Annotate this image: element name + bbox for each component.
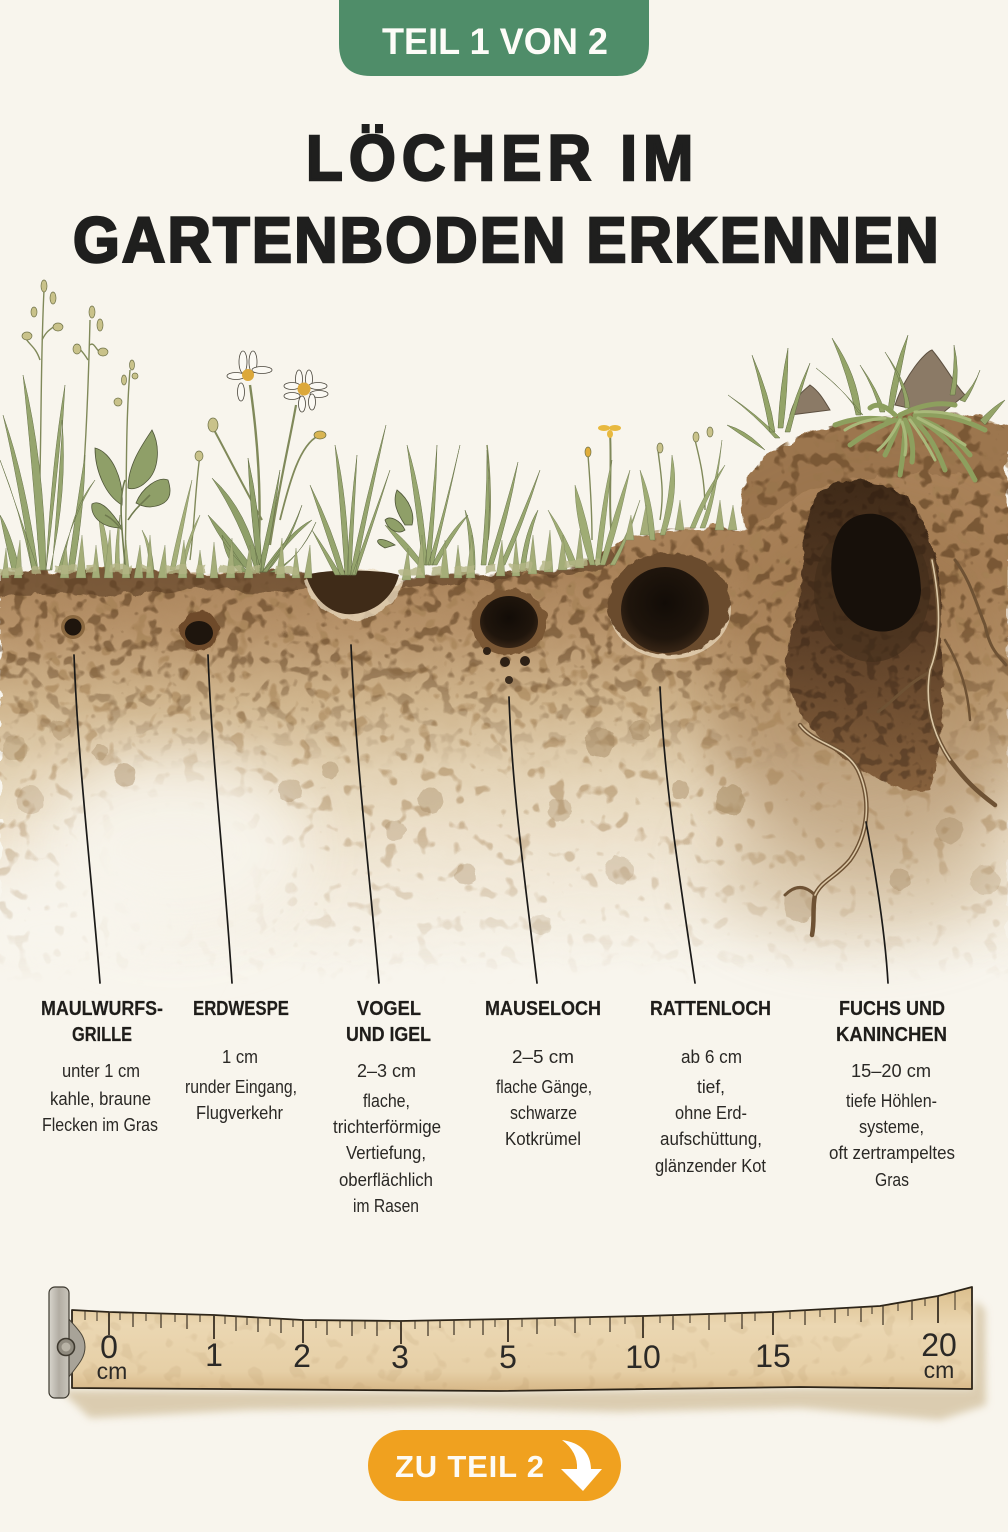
meadow blades bbox=[0, 375, 95, 570]
hole: fox and rabbit burrow bbox=[784, 478, 944, 792]
label: fox and rabbit: oft zertrampeltes bbox=[829, 1143, 955, 1163]
label: bird and hedgehog: VOGEL bbox=[357, 998, 421, 1020]
label: fox and rabbit: tiefe Höhlen- bbox=[846, 1091, 937, 1111]
grass and flowers on the lawn bbox=[0, 280, 1005, 580]
measuring tape ruler bbox=[49, 1285, 986, 1420]
label: bird and hedgehog: Vertiefung, bbox=[346, 1143, 426, 1163]
paler area on the left bbox=[0, 760, 310, 990]
button: to part 2 bbox=[368, 1430, 621, 1501]
label: fox and rabbit bbox=[829, 998, 955, 1190]
label: mouse hole: schwarze bbox=[510, 1103, 577, 1123]
label: rat hole: aufschüttung, bbox=[660, 1129, 762, 1149]
label: mouse hole: flache Gänge, bbox=[496, 1077, 592, 1097]
label: ground wasp: 1 cm bbox=[222, 1047, 258, 1067]
icon: curved down arrow bbox=[561, 1440, 602, 1491]
title: GARTENBODEN ERKENNEN bbox=[73, 205, 939, 276]
ruler shadow bbox=[60, 1300, 986, 1420]
tab: part label bbox=[339, 0, 649, 76]
label: ground wasp: ERDWESPE bbox=[193, 998, 289, 1020]
measuring tape ruler: 20 bbox=[921, 1327, 957, 1363]
measuring tape ruler: 1 bbox=[205, 1337, 223, 1373]
label: bird and hedgehog: UND IGEL bbox=[346, 1024, 431, 1046]
label: mole cricket bbox=[41, 998, 163, 1135]
measuring tape ruler: cm bbox=[924, 1357, 954, 1383]
label: ground wasp bbox=[185, 998, 297, 1123]
label: mouse hole: MAUSELOCH bbox=[485, 998, 601, 1020]
label: mouse hole: Kotkrümel bbox=[505, 1129, 581, 1149]
label: fox and rabbit: FUCHS UND bbox=[839, 998, 945, 1020]
label: mouse hole: 2–5 cm bbox=[512, 1047, 574, 1067]
buttercup bbox=[598, 425, 621, 438]
thin stems with seeds bbox=[24, 290, 705, 560]
soil base bbox=[0, 411, 1008, 985]
label: mole cricket: GRILLE bbox=[72, 1024, 132, 1046]
daisies bbox=[227, 351, 328, 412]
leaves bbox=[92, 430, 413, 548]
title bbox=[73, 123, 939, 276]
button: to part 2: ZU TEIL 2 bbox=[395, 1449, 544, 1484]
label: mole cricket: unter 1 cm bbox=[62, 1061, 140, 1081]
label: fox and rabbit: 15–20 cm bbox=[851, 1061, 931, 1081]
mound surface mottling bbox=[741, 411, 1008, 530]
label: bird and hedgehog: 2–3 cm bbox=[357, 1061, 416, 1081]
label: rat hole: ohne Erd- bbox=[675, 1103, 747, 1123]
tab: part label: TEIL 1 VON 2 bbox=[382, 21, 608, 62]
measuring tape ruler: 10 bbox=[625, 1339, 661, 1375]
round soil spots bbox=[2, 720, 1000, 935]
label: mole cricket: kahle, braune bbox=[50, 1089, 151, 1109]
label: mouse hole bbox=[485, 998, 601, 1149]
label: mole cricket: MAULWURFS- bbox=[41, 998, 163, 1020]
hole: mole cricket bbox=[61, 615, 85, 639]
rocks on the mound bbox=[790, 350, 965, 415]
seed heads bbox=[22, 280, 713, 461]
measuring tape ruler: 5 bbox=[499, 1339, 517, 1375]
dark topsoil band bbox=[0, 548, 616, 596]
label: ground wasp: runder Eingang, bbox=[185, 1077, 297, 1097]
darker soil on the right bbox=[705, 510, 1008, 940]
label: bird and hedgehog: flache, bbox=[363, 1091, 410, 1111]
grass mat on the mound bbox=[835, 404, 985, 480]
tick marks bbox=[85, 1292, 955, 1344]
label: bird and hedgehog: trichterförmige bbox=[333, 1117, 441, 1137]
measuring tape ruler: 3 bbox=[391, 1339, 409, 1375]
mottled soil blotches bbox=[0, 400, 1008, 1000]
label: rat hole: glänzender Kot bbox=[655, 1156, 766, 1176]
measuring tape ruler: 15 bbox=[755, 1338, 791, 1374]
metal end clip bbox=[68, 1318, 85, 1378]
label: ground wasp: Flugverkehr bbox=[196, 1103, 283, 1123]
label: fox and rabbit: systeme, bbox=[859, 1117, 924, 1137]
measuring tape ruler: cm bbox=[97, 1358, 127, 1384]
scale numbers: 0 bbox=[100, 1329, 118, 1365]
label: rat hole: RATTENLOCH bbox=[650, 998, 771, 1020]
short lawn grass bbox=[2, 500, 737, 580]
mound grass bbox=[727, 335, 1005, 450]
measuring tape ruler: 2 bbox=[293, 1338, 311, 1374]
label: bird and hedgehog: oberflächlich bbox=[339, 1170, 433, 1190]
soil cross-section illustration bbox=[0, 400, 1008, 1000]
label: bird and hedgehog bbox=[333, 998, 441, 1216]
label: mole cricket: Flecken im Gras bbox=[42, 1115, 158, 1135]
tape mottling bbox=[72, 1285, 972, 1391]
label: rat hole: ab 6 cm bbox=[681, 1047, 742, 1067]
hole: rat bbox=[608, 553, 731, 659]
label: rat hole: tief, bbox=[697, 1077, 725, 1097]
hole: bird and hedgehog crater bbox=[304, 569, 403, 620]
title: LÖCHER IM bbox=[306, 123, 693, 194]
label: fox and rabbit: Gras bbox=[875, 1170, 909, 1190]
hole: ground wasp bbox=[179, 611, 219, 651]
label: bird and hedgehog: im Rasen bbox=[353, 1196, 419, 1216]
hole: mouse with droppings bbox=[471, 589, 547, 684]
label: fox and rabbit: KANINCHEN bbox=[836, 1024, 947, 1046]
leader lines bbox=[74, 645, 888, 983]
tape body bbox=[72, 1287, 972, 1391]
moss strip bbox=[0, 560, 600, 574]
label: rat hole bbox=[650, 998, 771, 1176]
roots bbox=[785, 560, 1006, 935]
